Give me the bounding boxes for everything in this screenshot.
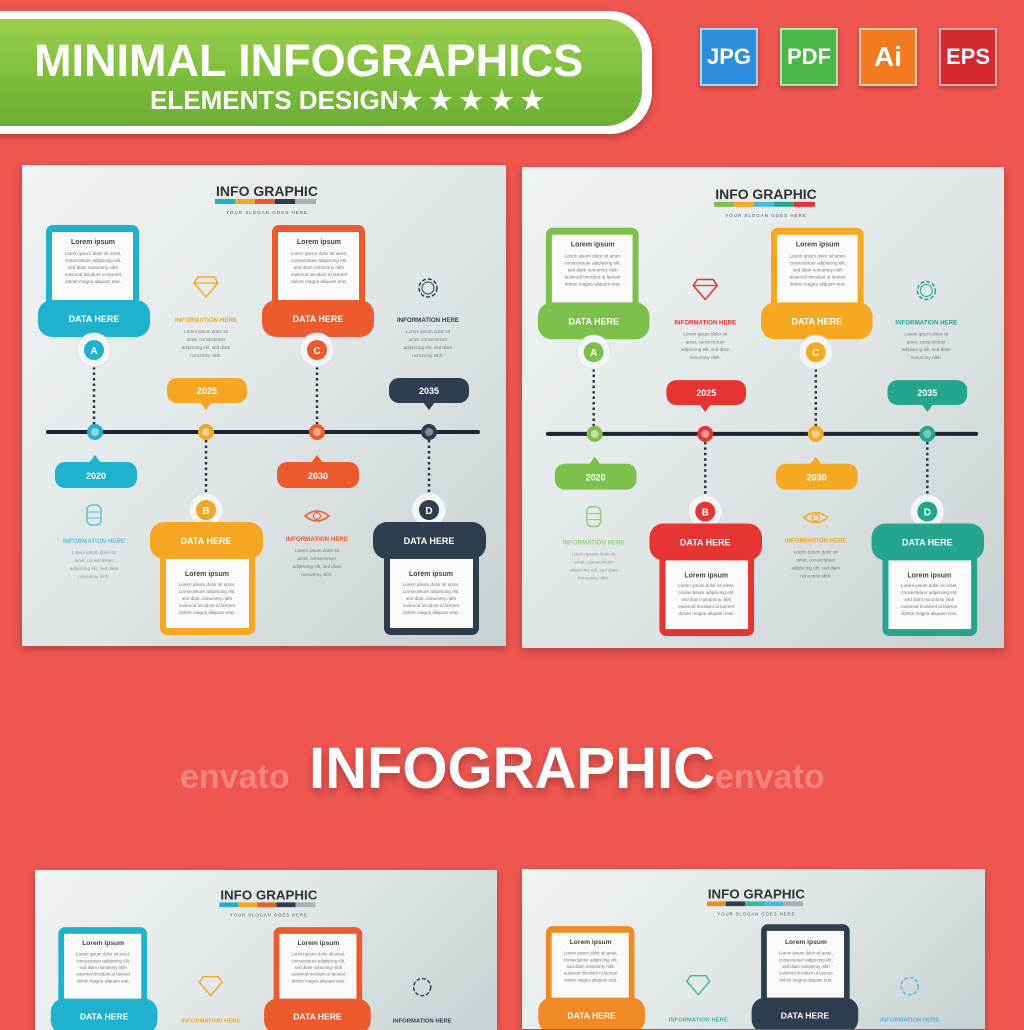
banner green pill xyxy=(0,19,642,126)
panel: timeline 2: A xyxy=(590,348,597,359)
panel: timeline 1: adipiscing elit, sed diam xyxy=(182,345,231,350)
panel: timeline 1: dolore magna aliquam erat. xyxy=(291,279,347,284)
panel: bottom left preview: euismod tincidunt ut laoreet xyxy=(292,972,346,977)
panel: timeline 2: Lorem ipsum dolor sit xyxy=(904,331,949,336)
panel: bottom right preview: euismod tincidunt ut laoreet xyxy=(564,971,618,976)
panel: timeline 2: dolore magna aliquam erat. xyxy=(790,282,846,287)
panel: bottom right preview xyxy=(522,869,985,1029)
panel: timeline 2: euismod tincidunt ut laoreet xyxy=(678,604,735,609)
panel: timeline 2: euismod tincidunt ut laoreet xyxy=(901,604,958,609)
panel: timeline 1: adipiscing elit, sed diam xyxy=(70,566,119,571)
icon: Ai xyxy=(859,28,917,86)
panel: timeline 2: INFORMATION HERE xyxy=(563,539,625,546)
panel: bottom right preview: Lorem ipsum xyxy=(785,939,827,946)
panel: bottom right preview: INFORMATION HERE xyxy=(880,1017,939,1023)
panel: timeline 1: INFORMATION HERE xyxy=(175,317,237,324)
panel: timeline 1: Lorem ipsum dolor sit amet, xyxy=(65,251,121,256)
panel: timeline 2: sed diam nonummy nibh xyxy=(904,597,955,602)
panel: timeline 1: Lorem ipsum dolor sit xyxy=(184,329,229,334)
panel: timeline 2: INFORMATION HERE xyxy=(785,537,847,544)
panel: timeline 1: DATA HERE xyxy=(181,536,231,546)
panel: timeline 2: sed diam nonummy nibh xyxy=(793,268,843,273)
panel: timeline 2: sed diam nonummy nibh xyxy=(568,268,618,273)
panel: bottom right preview: dolore magna aliquam erat. xyxy=(779,977,833,982)
panel: timeline 1: DATA HERE xyxy=(404,536,454,546)
panel: bottom left preview xyxy=(35,870,497,1030)
watermark: envato left: envato xyxy=(180,758,290,796)
panel: timeline 1: Lorem ipsum dolor sit xyxy=(295,548,340,553)
panel: bottom right preview: Lorem ipsum dolor sit amet, xyxy=(564,951,618,956)
panel: timeline 2: dolore magna aliquam erat. xyxy=(901,611,957,616)
panel: timeline 2: Lorem ipsum dolor sit amet, xyxy=(901,583,958,588)
panel: timeline 2: nonummy nibh. xyxy=(578,575,609,580)
heading: infographic: INFOGRAPHIC xyxy=(309,736,715,801)
panel: bottom left preview: YOUR SLOGAN GOES HERE xyxy=(230,913,308,918)
icon: Ai: Ai xyxy=(874,41,902,72)
panel: timeline 1: dolore magna aliquam erat. xyxy=(65,279,121,284)
panel: timeline 1: sed diam nonummy nibh xyxy=(68,265,118,270)
panel: bottom left preview: Lorem ipsum dolor sit amet, xyxy=(291,952,345,957)
panel: timeline 2: INFO GRAPHIC xyxy=(715,186,817,202)
watermark: envato right: envato xyxy=(715,758,825,796)
panel: timeline 1: euismod tincidunt ut laoreet xyxy=(403,603,460,608)
panel: timeline 1: amet, consectetuer xyxy=(297,556,337,561)
panel: timeline 1: nonummy nibh. xyxy=(412,353,444,358)
panel: timeline 1: nonummy nibh. xyxy=(301,572,333,577)
panel: timeline 2: 2025 xyxy=(696,388,716,398)
panel: bottom left preview: sed diam nonummy nibh xyxy=(79,965,128,970)
icon: JPG xyxy=(700,28,758,86)
panel: bottom left preview: INFORMATION HERE xyxy=(181,1018,240,1024)
panel: bottom right preview: Lorem ipsum dolor sit amet, xyxy=(779,951,833,956)
panel: timeline 2 xyxy=(522,167,1004,648)
panel: timeline 1: consectetuer adipiscing elit, xyxy=(291,258,347,263)
panel: timeline 2: DATA HERE xyxy=(791,316,842,326)
panel: timeline 1: A xyxy=(90,346,98,357)
icon: EPS xyxy=(939,28,997,86)
panel: timeline 2: sed diam nonummy nibh xyxy=(681,597,732,602)
panel: timeline 1: adipiscing elit, sed diam xyxy=(404,345,453,350)
panel: timeline 1: amet, consectetuer xyxy=(74,558,114,563)
panel: bottom left preview: euismod tincidunt ut laoreet xyxy=(76,972,131,977)
panel: bottom right preview: consectetuer adipiscing elit, xyxy=(779,957,833,962)
panel: timeline 1: Lorem ipsum xyxy=(409,571,453,578)
panel: timeline 1: INFO GRAPHIC xyxy=(216,183,318,199)
panel: timeline 2: Lorem ipsum dolor sit xyxy=(794,549,838,554)
panel: timeline 1: euismod tincidunt ut laoreet xyxy=(65,272,122,277)
panel: timeline 2: amet, consectetuer xyxy=(907,339,946,344)
panel: bottom left preview: Lorem ipsum xyxy=(82,940,124,947)
panel: timeline 1: euismod tincidunt ut laoreet xyxy=(291,272,348,277)
panel: timeline 1: consectetuer adipiscing elit, xyxy=(403,589,459,594)
icon: JPG: JPG xyxy=(707,44,751,69)
panel: timeline 2: Lorem ipsum xyxy=(907,572,951,579)
panel: bottom left preview: sed diam nonummy nibh xyxy=(295,965,343,970)
panel: timeline 2: adipiscing elit, sed diam xyxy=(569,567,618,572)
panel: timeline 2: consectetuer adipiscing elit, xyxy=(790,261,846,266)
panel: bottom left preview: dolore magna aliquam erat. xyxy=(77,978,130,983)
panel: timeline 1: YOUR SLOGAN GOES HERE xyxy=(226,210,308,215)
panel: timeline 1: amet, consectetuer xyxy=(408,337,448,342)
subtitle: elements design: ELEMENTS DESIGN★ ★ ★ ★ ★ xyxy=(150,85,544,115)
panel: timeline 1 xyxy=(22,165,506,646)
panel: timeline 1: Lorem ipsum dolor sit amet, xyxy=(179,582,235,587)
icon: PDF: PDF xyxy=(787,44,831,69)
panel: timeline 1: DATA HERE xyxy=(293,314,343,324)
panel: timeline 1: sed diam nonummy nibh xyxy=(406,596,456,601)
panel: bottom left preview: INFO GRAPHIC xyxy=(220,888,318,903)
panel: timeline 1: 2020 xyxy=(86,471,106,481)
header banner xyxy=(0,11,652,134)
panel: timeline 1: sed diam nonummy nibh xyxy=(294,265,344,270)
panel: timeline 1: Lorem ipsum dolor sit amet, xyxy=(291,251,347,256)
panel: timeline 2: Lorem ipsum xyxy=(571,242,615,249)
panel: bottom right preview: sed diam nonummy nibh xyxy=(782,964,830,969)
panel: timeline 2: INFORMATION HERE xyxy=(674,319,736,326)
panel: timeline 2: consectetuer adipiscing elit, xyxy=(565,261,621,266)
panel: bottom left preview: DATA HERE xyxy=(293,1012,342,1022)
panel: timeline 1: Lorem ipsum xyxy=(185,571,229,578)
panel: timeline 1: C xyxy=(313,346,321,357)
panel: timeline 2: nonummy nibh. xyxy=(800,573,831,578)
panel: timeline 2: nonummy nibh. xyxy=(690,355,721,360)
panel: timeline 2: consectetuer adipiscing elit, xyxy=(678,590,734,595)
panel: timeline 1: consectetuer adipiscing elit, xyxy=(179,589,235,594)
icon: PDF xyxy=(780,28,838,86)
panel: timeline 1: dolore magna aliquam erat. xyxy=(179,610,235,615)
panel: timeline 2: consectetuer adipiscing elit, xyxy=(901,590,957,595)
icon: EPS: EPS xyxy=(946,44,990,69)
panel: timeline 1: DATA HERE xyxy=(69,314,119,324)
panel: timeline 1: dolore magna aliquam erat. xyxy=(403,610,459,615)
panel: timeline 2: Lorem ipsum dolor sit xyxy=(572,551,616,556)
panel: timeline 2: DATA HERE xyxy=(902,537,953,547)
panel: timeline 2: amet, consectetuer xyxy=(796,557,836,562)
panel: timeline 1: B xyxy=(202,506,210,517)
panel: bottom right preview: DATA HERE xyxy=(567,1011,616,1021)
title: minimal infographics: MINIMAL INFOGRAPHICS xyxy=(34,35,583,86)
panel: timeline 1: INFORMATION HERE xyxy=(286,536,348,543)
panel: timeline 1: adipiscing elit, sed diam xyxy=(293,564,342,569)
panel: timeline 2: B xyxy=(702,508,709,519)
panel: timeline 2: amet, consectetuer xyxy=(686,339,725,344)
panel: timeline 2: dolore magna aliquam erat. xyxy=(678,611,734,616)
panel: bottom right preview: dolore magna aliquam erat. xyxy=(564,977,617,982)
panel: timeline 2: 2035 xyxy=(917,388,937,398)
panel: timeline 1: nonummy nibh. xyxy=(78,574,110,579)
panel: timeline 2: YOUR SLOGAN GOES HERE xyxy=(725,213,807,218)
panel: bottom right preview: YOUR SLOGAN GOES HERE xyxy=(717,912,795,917)
panel: timeline 2: adipiscing elit, sed diam xyxy=(791,565,840,570)
panel: timeline 2: Lorem ipsum dolor sit amet, xyxy=(678,583,734,588)
panel: timeline 2: adipiscing elit, sed diam xyxy=(681,347,730,352)
panel: timeline 1: D xyxy=(425,506,433,517)
panel: bottom right preview: euismod tincidunt ut laoreet xyxy=(779,971,833,976)
panel: bottom left preview: Lorem ipsum dolor sit amet, xyxy=(76,952,130,957)
panel: timeline 2: Lorem ipsum dolor sit amet, xyxy=(564,254,621,259)
panel: timeline 1: Lorem ipsum dolor sit amet, xyxy=(403,582,459,587)
panel: bottom left preview: DATA HERE xyxy=(80,1012,129,1022)
panel: timeline 1: INFORMATION HERE xyxy=(397,317,459,324)
panel: bottom left preview: INFORMATION HERE xyxy=(393,1018,452,1024)
panel: bottom right preview: sed diam nonummy nibh xyxy=(567,964,615,969)
panel: timeline 1: amet, consectetuer xyxy=(186,337,226,342)
panel: bottom left preview: consectetuer adipiscing elit, xyxy=(292,958,345,963)
panel: timeline 2: Lorem ipsum xyxy=(796,242,840,249)
panel: timeline 2: adipiscing elit, sed diam xyxy=(902,347,951,352)
panel: timeline 2: DATA HERE xyxy=(680,537,731,547)
panel: bottom right preview: DATA HERE xyxy=(781,1011,829,1021)
panel: timeline 1: 2025 xyxy=(197,386,217,396)
panel: timeline 1: 2035 xyxy=(419,386,439,396)
panel: bottom right preview: Lorem ipsum xyxy=(570,939,612,946)
panel: timeline 2: dolore magna aliquam erat. xyxy=(565,282,621,287)
panel: bottom left preview: Lorem ipsum xyxy=(297,940,339,947)
panel: timeline 2: euismod tincidunt ut laoreet xyxy=(565,275,621,280)
panel: timeline 1: Lorem ipsum xyxy=(297,239,341,246)
panel: timeline 1: consectetuer adipiscing elit, xyxy=(65,258,121,263)
panel: timeline 2: Lorem ipsum dolor sit amet, xyxy=(790,254,846,259)
panel: timeline 1: Lorem ipsum dolor sit xyxy=(72,550,117,555)
panel: timeline 1: 2030 xyxy=(308,471,328,481)
panel: timeline 2: nonummy nibh. xyxy=(911,355,942,360)
panel: timeline 2: DATA HERE xyxy=(568,316,619,326)
panel: bottom left preview: consectetuer adipiscing elit, xyxy=(76,958,130,963)
panel: bottom right preview: consectetuer adipiscing elit, xyxy=(564,957,618,962)
panel: timeline 2: C xyxy=(812,348,819,359)
panel: timeline 2: euismod tincidunt ut laoreet xyxy=(790,275,846,280)
panel: timeline 1: Lorem ipsum xyxy=(71,239,115,246)
panel: timeline 1: nonummy nibh. xyxy=(190,353,222,358)
panel: timeline 2: 2030 xyxy=(807,473,827,483)
panel: bottom right preview: INFO GRAPHIC xyxy=(708,887,805,902)
panel: timeline 2: 2020 xyxy=(586,473,606,483)
panel: timeline 1: euismod tincidunt ut laoreet xyxy=(179,603,236,608)
panel: timeline 2: INFORMATION HERE xyxy=(895,319,957,326)
panel: bottom left preview: dolore magna aliquam erat. xyxy=(292,978,345,983)
panel: timeline 2: Lorem ipsum dolor sit xyxy=(683,331,728,336)
panel: timeline 1: INFORMATION HERE xyxy=(63,538,125,545)
panel: timeline 2: Lorem ipsum xyxy=(684,572,728,579)
panel: bottom right preview: INFORMATION HERE xyxy=(669,1017,728,1023)
panel: timeline 1: Lorem ipsum dolor sit xyxy=(406,329,451,334)
panel: timeline 2: amet, consectetuer xyxy=(574,559,614,564)
panel: timeline 2: D xyxy=(924,508,931,519)
panel: timeline 1: sed diam nonummy nibh xyxy=(182,596,232,601)
